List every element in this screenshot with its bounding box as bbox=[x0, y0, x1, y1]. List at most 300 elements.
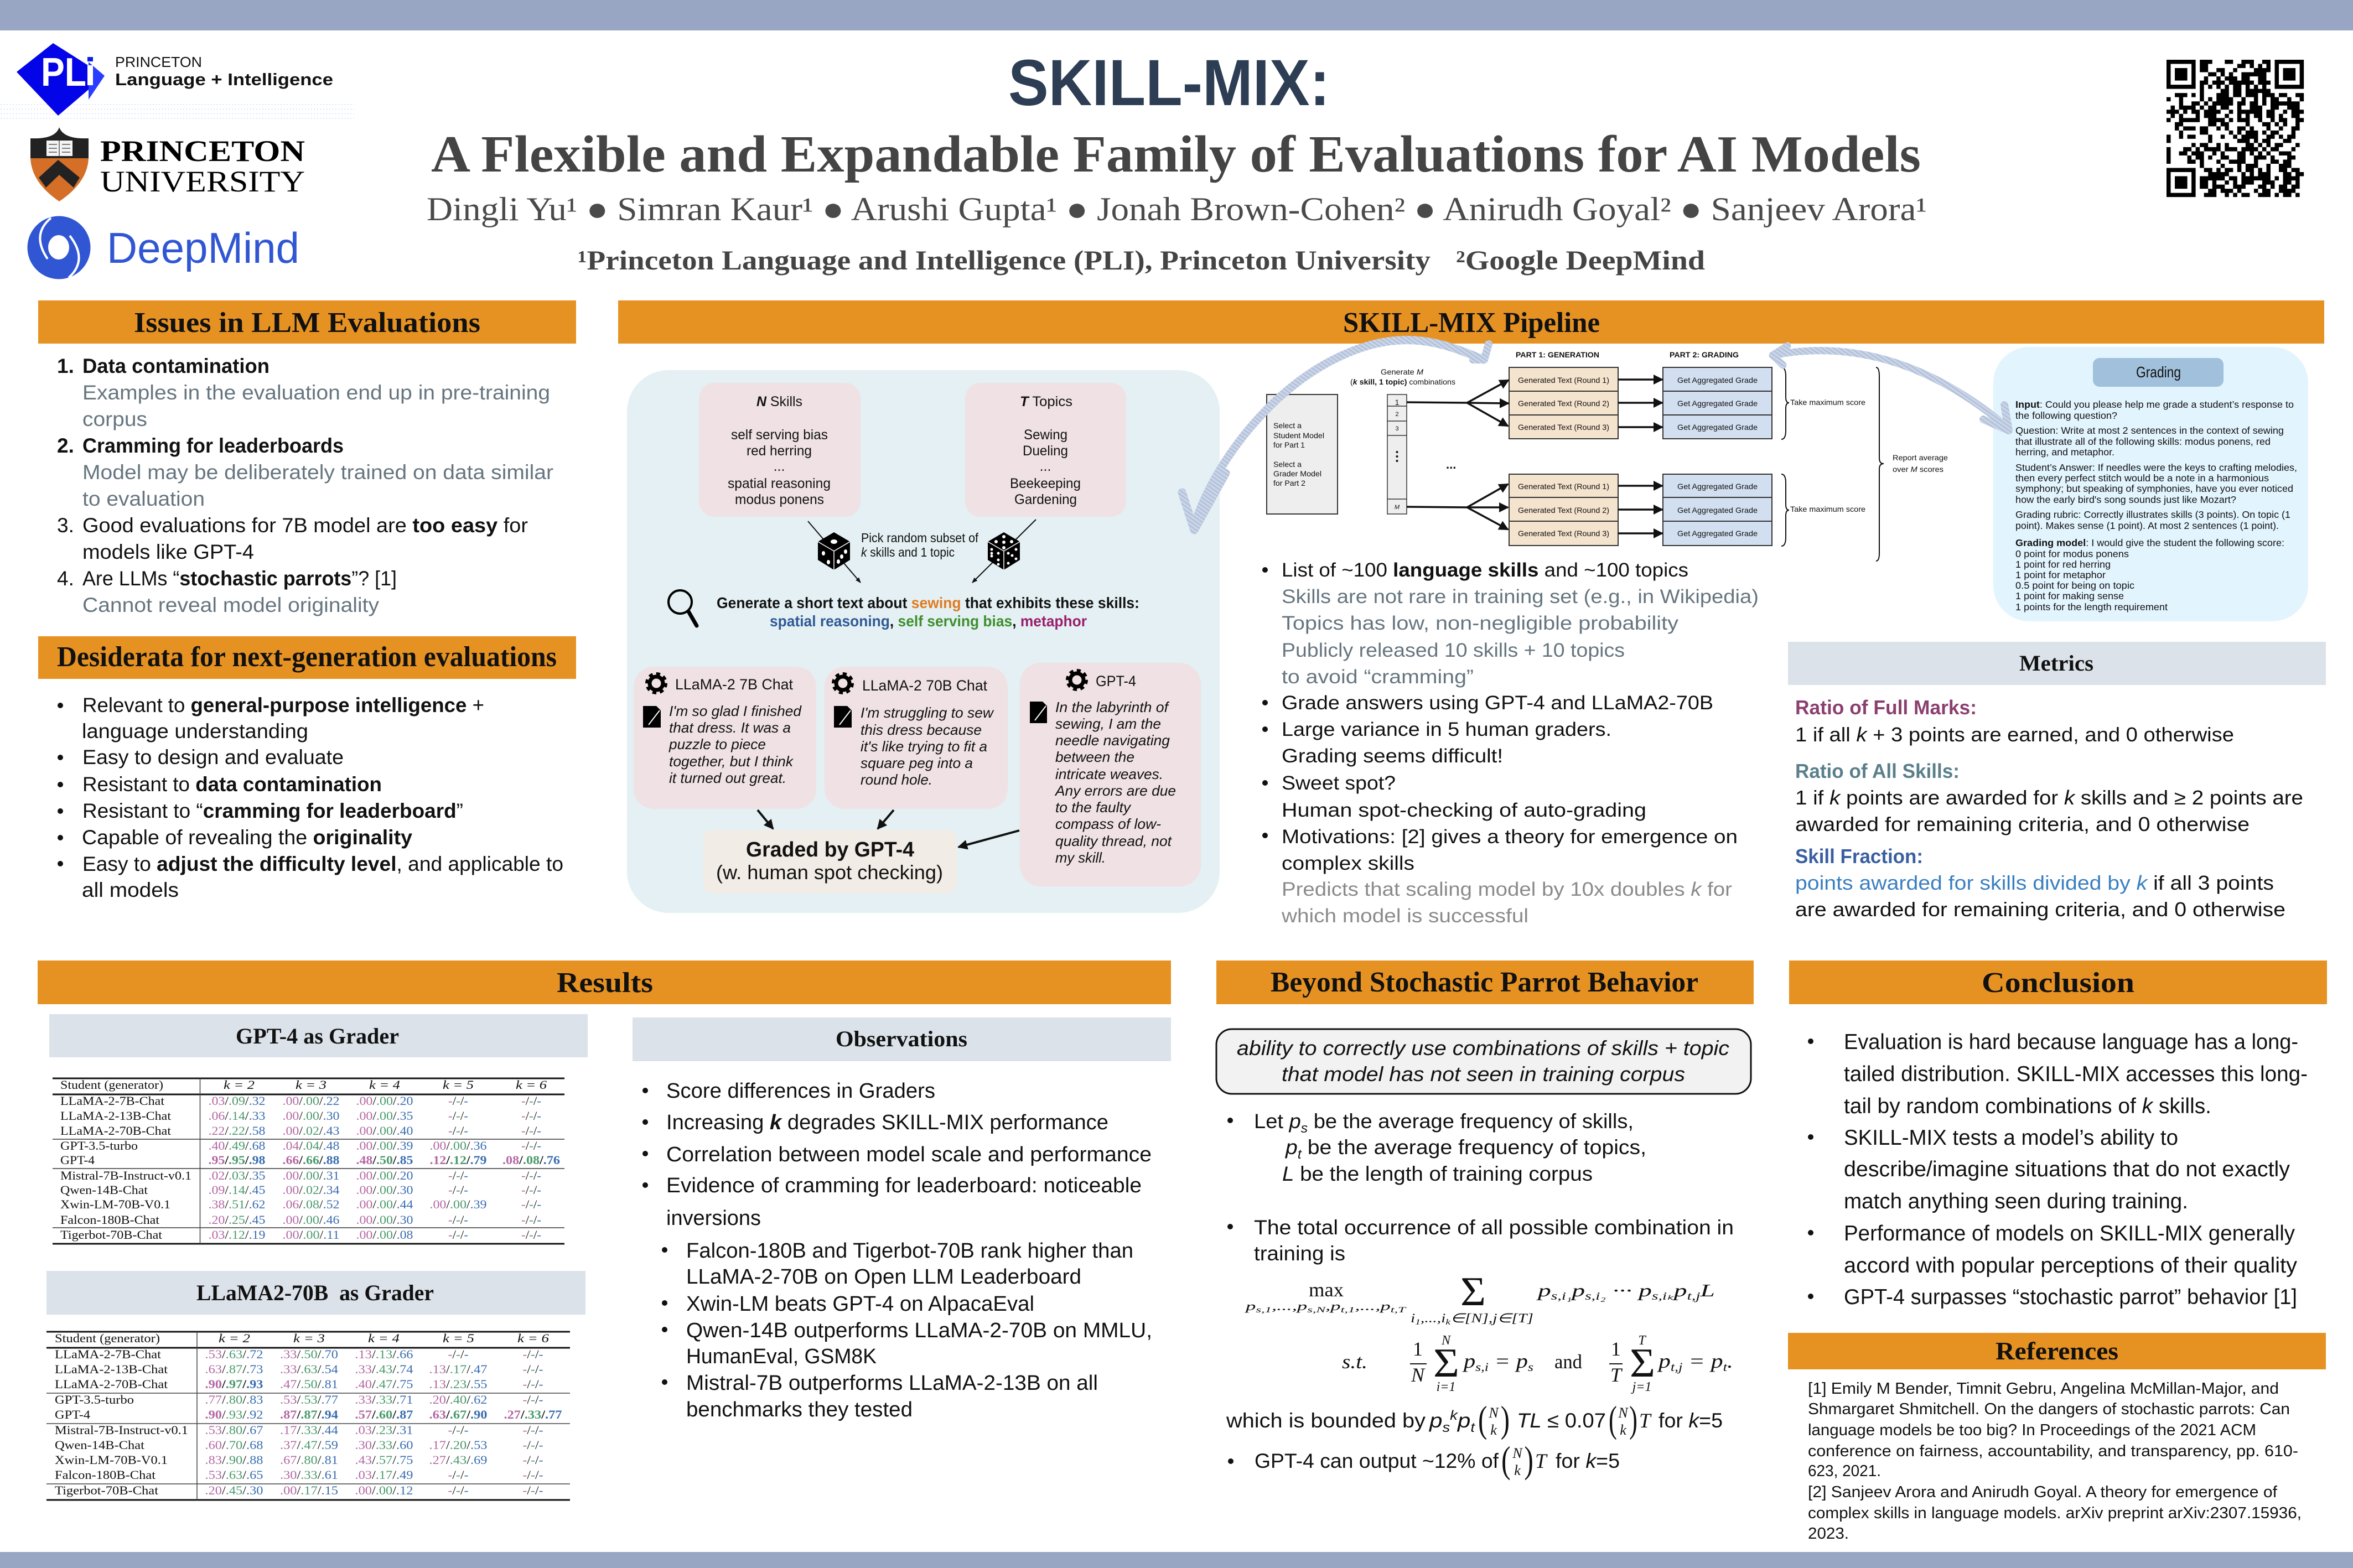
logo: Princeton University: PRINCETON bbox=[100, 134, 305, 168]
table: LLaMA2-70B grader scores: .13/.13/.66 bbox=[355, 1347, 413, 1361]
label: ellipsis: ... bbox=[1446, 458, 1456, 471]
heading: GPT-4 as grader bbox=[49, 1014, 588, 1057]
table: GPT-4 grader scores: .06/.14/.33 bbox=[208, 1109, 266, 1123]
table: LLaMA2-70B grader scores: .00/.00/.12 bbox=[355, 1483, 413, 1497]
table: GPT-4 grader scores: .06/.08/.52 bbox=[282, 1197, 340, 1211]
table: LLaMA2-70B grader scores: .13/.17/.47 bbox=[429, 1362, 487, 1376]
table: GPT-4 grader scores: .03/.09/.32 bbox=[208, 1094, 266, 1108]
text block: issues list: 1. bbox=[57, 355, 74, 377]
text block: definitions: Let p bbox=[1254, 1110, 1300, 1133]
equation: constraints: t,j bbox=[1671, 1360, 1682, 1374]
box: select models bbox=[1267, 394, 1338, 514]
equation: maximization: ∈[N],j∈[T] bbox=[1450, 1311, 1533, 1325]
table: GPT-4 grader scores: -/-/- bbox=[521, 1094, 541, 1108]
heading: issues bbox=[38, 300, 576, 344]
table: GPT-4 grader scores bbox=[53, 1078, 564, 1244]
text block: desiderata list bbox=[58, 694, 563, 901]
table: LLaMA2-70B grader scores: .33/.33/.71 bbox=[355, 1393, 413, 1406]
table: GPT-4 grader scores: -/-/- bbox=[521, 1213, 541, 1227]
table: LLaMA2-70B grader scores: k = 3 bbox=[293, 1331, 325, 1345]
text block: bound: N bbox=[1488, 1405, 1499, 1421]
equation: constraints: N bbox=[1441, 1333, 1452, 1348]
heading: SKILL-MIX pipeline: SKILL-MIX Pipeline bbox=[1343, 307, 1600, 339]
table: LLaMA2-70B grader scores: .53/.53/.77 bbox=[280, 1393, 338, 1406]
box: select models: Student Model bbox=[1273, 431, 1324, 440]
text block: issues list: 2. bbox=[57, 434, 74, 457]
table: LLaMA2-70B grader scores: .53/.80/.67 bbox=[205, 1423, 263, 1437]
text block: bound: for k=5 bbox=[1658, 1409, 1723, 1432]
column: combinations list: M bbox=[1395, 504, 1400, 511]
table: GPT-4 grader scores: LLaMA-2-7B-Chat bbox=[60, 1094, 164, 1108]
text block: conclusion bullets: tail by random combinations of k skills. bbox=[1844, 1094, 2211, 1118]
text block: bound: TL ≤ 0.07 bbox=[1517, 1409, 1606, 1432]
box: T topics: Beekeeping bbox=[1010, 476, 1081, 491]
equation: maximization: Σ bbox=[1460, 1269, 1486, 1315]
table: GPT-4 grader scores: -/-/- bbox=[448, 1109, 468, 1123]
arrow: topics through die bbox=[972, 520, 1036, 583]
text block: bound: ( ) bbox=[1478, 1398, 1510, 1440]
text block: observation bullets: inversions bbox=[666, 1207, 761, 1230]
table: GPT-4 grader scores: .12/.12/.79 bbox=[429, 1153, 487, 1167]
box: grading header bbox=[2093, 358, 2224, 387]
table: LLaMA2-70B grader scores: .63/.87/.73 bbox=[205, 1362, 263, 1376]
text block: ratio of all skills: awarded for remaining criteria, and 0 otherwise bbox=[1795, 813, 2250, 835]
box: T topics bbox=[965, 383, 1126, 517]
text block: issues list: 3. bbox=[57, 514, 74, 537]
table: GPT-4 grader scores: -/-/- bbox=[448, 1213, 468, 1227]
table: LLaMA2-70B grader scores: .33/.63/.54 bbox=[280, 1362, 338, 1376]
logo: Princeton Language + Intelligence: PRINCETON bbox=[115, 54, 202, 70]
heading: beyond: Beyond Stochastic Parrot Behavior bbox=[1271, 967, 1698, 998]
box: GPT-4 output: to the faulty bbox=[1055, 799, 1132, 816]
table: GPT-4 grader scores: -/-/- bbox=[521, 1183, 541, 1197]
text block: conclusion bullets: SKILL-MIX tests a model’s ability to bbox=[1844, 1126, 2178, 1150]
text block: ratio of all skills bbox=[1795, 760, 2303, 835]
table: GPT-4 grader scores: .00/.00/.20 bbox=[356, 1169, 413, 1182]
table: GPT-4 grader scores: GPT-3.5-turbo bbox=[60, 1139, 138, 1152]
text block: definitions: be the average frequency of skills, bbox=[1308, 1110, 1634, 1133]
heading: LLaMA2-70B as grader bbox=[46, 1271, 585, 1315]
table: LLaMA2-70B grader scores: -/-/- bbox=[522, 1453, 543, 1467]
table: LLaMA2-70B grader scores: .33/.43/.74 bbox=[355, 1362, 413, 1376]
equation: maximization: s,N bbox=[1307, 1306, 1326, 1315]
box: LLaMA-2 7B output: LLaMA-2 7B Chat bbox=[675, 676, 793, 693]
label: generate M combinations: Generate M bbox=[1381, 367, 1423, 376]
table: LLaMA2-70B grader scores: -/-/- bbox=[522, 1483, 543, 1497]
text block: GPT-4 output: k bbox=[1514, 1462, 1521, 1478]
table: LLaMA2-70B grader scores: Student (generator) bbox=[55, 1331, 160, 1345]
equation: constraints: j=1 bbox=[1631, 1380, 1651, 1394]
table: GPT-4 grader scores: Qwen-14B-Chat bbox=[60, 1183, 148, 1197]
table: GPT-4 grader scores: -/-/- bbox=[521, 1109, 541, 1123]
box: LLaMA-2 70B output bbox=[825, 667, 1008, 809]
text block: pipeline notes: Motivations: [2] gives a theory for emergence on bbox=[1282, 826, 1738, 848]
panel: LLaMA2-70B as grader bbox=[46, 1271, 585, 1500]
table: GPT-4 grader scores: .00/.00/.11 bbox=[282, 1228, 340, 1242]
text block: grading prompt: 0.5 point for being on topic bbox=[2015, 580, 2134, 591]
text block: grading prompt: Grading model: I would give the student the following score: bbox=[2015, 537, 2284, 548]
table: LLaMA2-70B grader scores: Falcon-180B-Chat bbox=[55, 1468, 156, 1482]
text block: bound: k bbox=[1450, 1408, 1459, 1423]
table: LLaMA2-70B grader scores: -/-/- bbox=[522, 1468, 543, 1482]
group: first combination rounds bbox=[1407, 367, 1865, 439]
text block: definitions: L be the length of training corpus bbox=[1282, 1162, 1593, 1185]
table: LLaMA2-70B grader scores: .27/.43/.69 bbox=[429, 1453, 487, 1467]
heading: LLaMA2-70B as grader: LLaMA2-70B as Grader bbox=[196, 1280, 434, 1305]
box: LLaMA-2 70B output: I'm struggling to sew bbox=[861, 704, 994, 721]
text block: GPT-4 output: for k=5 bbox=[1556, 1450, 1620, 1472]
text block: grading prompt bbox=[2015, 399, 2297, 612]
text block: issues list: Model may be deliberately trained on data similar bbox=[82, 461, 553, 484]
label: pick random subset: Pick random subset of bbox=[861, 531, 979, 545]
table: LLaMA2-70B grader scores: .90/.97/.93 bbox=[205, 1377, 263, 1391]
table: LLaMA2-70B grader scores: .20/.45/.30 bbox=[205, 1483, 263, 1497]
table: LLaMA2-70B grader scores: .00/.17/.15 bbox=[280, 1483, 338, 1497]
heading: issues: Issues in LLM Evaluations bbox=[134, 307, 480, 339]
label: generate M combinations: (k skill, 1 topic) combinations bbox=[1350, 377, 1455, 386]
text block: grading prompt: Student’s Answer: If needles were the keys to crafting melodies, bbox=[2015, 462, 2297, 473]
equation: maximization: p bbox=[1538, 1280, 1547, 1300]
table: LLaMA2-70B grader scores: .37/.47/.59 bbox=[280, 1438, 338, 1452]
arrow: 70B to grader bbox=[878, 810, 894, 829]
text block: issues list: Are LLMs “stochastic parrots”? [1] bbox=[82, 567, 397, 590]
arrow: 7B to grader bbox=[758, 810, 773, 829]
group: last combination rounds: Get Aggregated Grade bbox=[1677, 482, 1758, 491]
equation: maximization: L bbox=[1699, 1280, 1715, 1300]
table: GPT-4 grader scores: .08/.08/.76 bbox=[502, 1153, 560, 1167]
table: LLaMA2-70B grader scores: .63/.67/.90 bbox=[429, 1408, 487, 1421]
table: GPT-4 grader scores: .00/.00/.40 bbox=[356, 1124, 413, 1138]
text block: issues list: Good evaluations for 7B model are too easy for bbox=[82, 514, 528, 537]
box: LLaMA-2 70B output: LLaMA-2 70B Chat bbox=[862, 677, 987, 694]
table: LLaMA2-70B grader scores: Tigerbot-70B-Chat bbox=[55, 1483, 158, 1497]
text block: conclusion bullets: describe/imagine situations that do not exactly bbox=[1844, 1157, 2290, 1181]
panel: grading example bbox=[1993, 347, 2308, 621]
table: LLaMA2-70B grader scores: -/-/- bbox=[448, 1483, 468, 1497]
column: combinations list: 2 bbox=[1395, 411, 1399, 418]
table: GPT-4 grader scores: Student (generator) bbox=[60, 1078, 163, 1092]
equation: constraints bbox=[1342, 1333, 1733, 1394]
text block: issues list: Cramming for leaderboards bbox=[82, 434, 344, 457]
text block: observation bullets: Correlation between model scale and performance bbox=[666, 1143, 1152, 1166]
logo: Princeton Language + Intelligence bbox=[0, 43, 354, 122]
table: GPT-4 grader scores: .20/.25/.45 bbox=[208, 1213, 266, 1227]
heading: observations: Observations bbox=[836, 1026, 967, 1051]
text block: grading prompt: how the early bird's song sounds just like Mozart? bbox=[2015, 494, 2236, 505]
affiliations bbox=[578, 245, 1705, 276]
panel: metrics bbox=[1788, 642, 2326, 921]
heading: conclusion bbox=[1789, 960, 2327, 1004]
box: LLaMA-2 70B output: it's like trying to fit a bbox=[861, 738, 987, 755]
table: GPT-4 grader scores: .00/.00/.39 bbox=[356, 1139, 413, 1152]
table: LLaMA2-70B grader scores: .30/.33/.60 bbox=[355, 1438, 413, 1452]
box: GPT-4 output: sewing, I am the bbox=[1055, 715, 1161, 732]
box: graded by GPT-4 bbox=[703, 830, 957, 894]
heading: metrics: Metrics bbox=[2019, 651, 2093, 676]
equation: constraints: p bbox=[1464, 1350, 1474, 1372]
box: select models: for Part 2 bbox=[1273, 479, 1305, 487]
box: T topics: Dueling bbox=[1023, 443, 1068, 459]
text block: definitions: The total occurrence of all possible combination in bbox=[1254, 1216, 1734, 1239]
table: GPT-4 grader scores: GPT-4 bbox=[60, 1153, 95, 1167]
heading: beyond bbox=[1216, 960, 1754, 1004]
icon: magnifying glass bbox=[668, 590, 697, 626]
box: graded by GPT-4: (w. human spot checking) bbox=[716, 861, 943, 884]
text block: observation bullets: Evidence of cramming for leaderboard: noticeable bbox=[666, 1174, 1142, 1197]
text block: skill fraction: points awarded for skills divided by k if all 3 points bbox=[1795, 871, 2274, 894]
text block: pipeline notes: Large variance in 5 human graders. bbox=[1282, 719, 1611, 740]
text block: desiderata list: Capable of revealing the originality bbox=[82, 826, 412, 849]
table: LLaMA2-70B grader scores: -/-/- bbox=[522, 1393, 543, 1406]
table: GPT-4 grader scores: .66/.66/.88 bbox=[282, 1153, 340, 1167]
table: LLaMA2-70B grader scores bbox=[46, 1331, 570, 1500]
column: combinations list: 3 bbox=[1395, 425, 1399, 432]
text block: grading prompt: 1 point for making sense bbox=[2015, 590, 2124, 601]
text block: conclusion bullets: match anything seen during training. bbox=[1844, 1190, 2188, 1213]
table: GPT-4 grader scores: k = 4 bbox=[369, 1078, 400, 1092]
table: LLaMA2-70B grader scores: GPT-3.5-turbo bbox=[55, 1393, 134, 1406]
table: GPT-4 grader scores: .03/.12/.19 bbox=[208, 1228, 266, 1242]
box: N skills: ... bbox=[774, 459, 785, 474]
text block: grading prompt: symphony; but speaking of symphonies, have you ever noticed bbox=[2015, 483, 2293, 494]
equation: constraints: 1 bbox=[1611, 1338, 1621, 1360]
equation: maximization: t,1 bbox=[1341, 1306, 1355, 1315]
table: LLaMA2-70B grader scores: .17/.20/.53 bbox=[429, 1438, 487, 1452]
table: GPT-4 grader scores: -/-/- bbox=[448, 1183, 468, 1197]
panel: conclusion bbox=[1789, 960, 2327, 1309]
text block: pipeline notes: Predicts that scaling model by 10x doubles k for bbox=[1282, 879, 1732, 900]
text block: conclusion bullets bbox=[1808, 1030, 2308, 1309]
table: GPT-4 grader scores: .02/.03/.35 bbox=[208, 1169, 266, 1182]
table: LLaMA2-70B grader scores: k = 5 bbox=[443, 1331, 474, 1345]
table: LLaMA2-70B grader scores: .27/.33/.77 bbox=[504, 1408, 562, 1421]
group: first combination rounds: Get Aggregated Grade bbox=[1677, 399, 1758, 408]
text block: reference list: Shmargaret Shmitchell. On the dangers of stochastic parrots: Can bbox=[1808, 1400, 2290, 1418]
text block: reference list: language models be too big? In Proceedings of the 2021 ACM bbox=[1808, 1421, 2256, 1439]
group: last combination rounds: Generated Text (Round 2) bbox=[1518, 506, 1609, 515]
text block: desiderata list: Relevant to general-purpose intelligence + bbox=[82, 694, 484, 716]
heading: SKILL-MIX pipeline bbox=[618, 300, 2324, 344]
group: first combination rounds: Take maximum score bbox=[1790, 398, 1865, 407]
text block: skill fraction bbox=[1795, 845, 2285, 921]
text block: definitions: t bbox=[1298, 1147, 1302, 1162]
table: LLaMA2-70B grader scores: -/-/- bbox=[522, 1362, 543, 1376]
text block: bound: s bbox=[1442, 1420, 1450, 1435]
box: grading header: Grading bbox=[2136, 364, 2181, 381]
text block: observation bullets: Qwen-14B outperforms LLaMA-2-70B on MMLU, bbox=[686, 1319, 1152, 1342]
table: LLaMA2-70B grader scores: .17/.33/.44 bbox=[280, 1423, 338, 1437]
table: LLaMA2-70B grader scores: Mistral-7B-Instruct-v0.1 bbox=[55, 1423, 188, 1437]
table: GPT-4 grader scores: .00/.00/.46 bbox=[282, 1213, 340, 1227]
text block: bound: t bbox=[1470, 1420, 1476, 1435]
table: GPT-4 grader scores: -/-/- bbox=[448, 1094, 468, 1108]
title: SKILL-MIX: bbox=[1008, 46, 1330, 120]
text block: conclusion bullets: GPT-4 surpasses “stochastic parrot” behavior [1] bbox=[1844, 1285, 2297, 1309]
arrow: hand-drawn to generation panel bbox=[1182, 340, 1489, 530]
text block: observation bullets: Increasing k degrades SKILL-MIX performance bbox=[666, 1111, 1108, 1134]
text block: pipeline notes: Human spot-checking of auto-grading bbox=[1282, 799, 1646, 821]
table: LLaMA2-70B grader scores: k = 2 bbox=[219, 1331, 250, 1345]
heading: references bbox=[1788, 1333, 2326, 1369]
callout: definition: ability to correctly use combinations of skills + topic bbox=[1237, 1037, 1730, 1060]
table: LLaMA2-70B grader scores: .13/.23/.55 bbox=[429, 1377, 487, 1391]
label: pick random subset: k skills and 1 topic bbox=[861, 545, 955, 559]
panel: observations bbox=[633, 1017, 1171, 1421]
box: GPT-4 output: needle navigating bbox=[1055, 732, 1170, 749]
text block: pipeline notes bbox=[1262, 559, 1759, 927]
box: select models: for Part 1 bbox=[1273, 440, 1305, 449]
text block: pipeline notes: Skills are not rare in training set (e.g., in Wikipedia) bbox=[1282, 586, 1759, 608]
equation: constraints: N bbox=[1411, 1364, 1426, 1386]
text block: bound: k bbox=[1620, 1422, 1626, 1438]
brace: report average bbox=[1876, 367, 1948, 561]
text block: bound: k bbox=[1490, 1422, 1497, 1438]
box: LLaMA-2 7B output bbox=[634, 667, 816, 809]
group: first combination rounds: Get Aggregated Grade bbox=[1677, 423, 1758, 432]
text block: pipeline notes: Grading seems difficult! bbox=[1282, 745, 1503, 767]
text block: bound: N bbox=[1618, 1405, 1629, 1421]
panel: desiderata bbox=[38, 636, 576, 901]
group: last combination rounds: Get Aggregated Grade bbox=[1677, 529, 1758, 538]
equation: constraints: = p bbox=[1682, 1350, 1723, 1372]
group: last combination rounds: Generated Text (Round 1) bbox=[1518, 482, 1609, 491]
equation: constraints: s bbox=[1528, 1360, 1533, 1374]
box: select models: Select a bbox=[1273, 421, 1302, 430]
text block: bound: p bbox=[1429, 1409, 1441, 1432]
table: GPT-4 grader scores: .00/.00/.30 bbox=[356, 1213, 413, 1227]
heading: results: Results bbox=[557, 967, 653, 999]
logo: DeepMind: DeepMind bbox=[107, 224, 299, 272]
heading: conclusion: Conclusion bbox=[1982, 967, 2134, 999]
table: GPT-4 grader scores: .00/.00/.44 bbox=[356, 1197, 413, 1211]
equation: maximization: ··· p bbox=[1606, 1280, 1652, 1300]
subtitle: A Flexible and Expandable Family of Evaluations for AI Models bbox=[431, 126, 1921, 183]
table: GPT-4 grader scores: .00/.00/.31 bbox=[282, 1169, 340, 1182]
text block: observation bullets: LLaMA-2-70B on Open LLM Leaderboard bbox=[686, 1265, 1081, 1289]
box: N skills: N Skills bbox=[756, 394, 802, 409]
text block: grading prompt: the following question? bbox=[2015, 410, 2117, 421]
table: LLaMA2-70B grader scores: .53/.63/.72 bbox=[205, 1347, 263, 1361]
text block: bound: T bbox=[1639, 1410, 1652, 1432]
table: GPT-4 grader scores: .95/.95/.98 bbox=[208, 1153, 266, 1167]
table: GPT-4 grader scores: k = 3 bbox=[296, 1078, 326, 1092]
table: GPT-4 grader scores: -/-/- bbox=[448, 1124, 468, 1138]
group: last combination rounds: Get Aggregated Grade bbox=[1677, 506, 1758, 515]
text block: desiderata list: all models bbox=[82, 879, 179, 901]
equation: maximization: 1 bbox=[1415, 1318, 1421, 1327]
group: first combination rounds: Get Aggregated Grade bbox=[1677, 376, 1758, 385]
table: GPT-4 grader scores: .00/.00/.36 bbox=[429, 1139, 487, 1152]
box: GPT-4 output: intricate weaves. bbox=[1055, 766, 1163, 782]
table: LLaMA2-70B grader scores: .60/.70/.68 bbox=[205, 1438, 263, 1452]
text block: pipeline notes: Sweet spot? bbox=[1282, 772, 1396, 794]
table: GPT-4 grader scores: .00/.00/.39 bbox=[429, 1197, 487, 1211]
top banner bbox=[0, 0, 2353, 30]
equation: maximization: ,...,i bbox=[1421, 1311, 1445, 1325]
table: LLaMA2-70B grader scores: .03/.23/.31 bbox=[355, 1423, 413, 1437]
text block: issues list: Examples in the evaluation end up in pre-training bbox=[82, 381, 550, 404]
box: GPT-4 output: quality thread, not bbox=[1055, 833, 1173, 849]
text block: prompt: spatial reasoning, self serving bias, metaphor bbox=[770, 612, 1087, 630]
equation: maximization: p bbox=[1246, 1299, 1252, 1313]
box: select models: Grader Model bbox=[1273, 469, 1321, 478]
text block: observation bullets: Xwin-LM beats GPT-4 on AlpacaEval bbox=[686, 1292, 1034, 1316]
text block: GPT-4 output: ( ) bbox=[1501, 1439, 1533, 1481]
text block: bound: ( ) bbox=[1609, 1398, 1637, 1440]
text block: grading prompt: that illustrate all of the following skills: modus ponens, red bbox=[2015, 436, 2271, 447]
table: GPT-4 grader scores: .22/.22/.58 bbox=[208, 1124, 266, 1138]
text block: ratio of full marks bbox=[1795, 696, 2234, 746]
equation: constraints: s,i bbox=[1475, 1360, 1489, 1374]
box: LLaMA-2 70B output: this dress because bbox=[861, 721, 982, 738]
equation: constraints: = p bbox=[1489, 1350, 1528, 1372]
table: GPT-4 grader scores: .00/.00/.35 bbox=[356, 1109, 413, 1123]
box: N skills: red herring bbox=[747, 443, 812, 459]
text block: reference list bbox=[1808, 1380, 2302, 1543]
table: GPT-4 grader scores: .00/.00/.20 bbox=[356, 1094, 413, 1108]
table: LLaMA2-70B grader scores: -/-/- bbox=[522, 1423, 543, 1437]
table: GPT-4 grader scores: Falcon-180B-Chat bbox=[60, 1213, 159, 1227]
heading: observations bbox=[633, 1017, 1171, 1061]
text block: reference list: [1] Emily M Bender, Timnit Gebru, Angelina McMillan-Major, and bbox=[1808, 1380, 2279, 1398]
arrow: GPT-4 to grader bbox=[958, 830, 1019, 847]
chart: pipeline diagram bbox=[1267, 350, 1948, 561]
equation: maximization: i bbox=[1411, 1311, 1414, 1325]
table: GPT-4 grader scores: .40/.49/.68 bbox=[208, 1139, 266, 1152]
text block: issues list bbox=[57, 355, 553, 616]
text block: ratio of full marks: 1 if all k + 3 points are earned, and 0 otherwise bbox=[1795, 723, 2234, 746]
text block: issues list: 4. bbox=[57, 567, 74, 590]
heading: results bbox=[38, 960, 1171, 1004]
bottom banner bbox=[0, 1552, 2353, 1568]
text block: pipeline notes: Topics has low, non-negligible probability bbox=[1282, 612, 1679, 634]
text block: definitions bbox=[1227, 1110, 1734, 1265]
panel: generation example bbox=[627, 370, 1220, 913]
text block: grading prompt: 1 point for metaphor bbox=[2015, 569, 2106, 580]
table: GPT-4 grader scores: -/-/- bbox=[521, 1139, 541, 1152]
table: GPT-4 grader scores: .00/.00/.30 bbox=[282, 1109, 340, 1123]
label: generate M combinations bbox=[1350, 367, 1455, 386]
table: LLaMA2-70B grader scores: .47/.50/.81 bbox=[280, 1377, 338, 1391]
box: N skills: modus ponens bbox=[735, 492, 824, 507]
text block: conclusion bullets: Evaluation is hard because language has a long- bbox=[1844, 1030, 2298, 1054]
equation: maximization: s,i₁ bbox=[1551, 1290, 1572, 1302]
table: GPT-4 grader scores: LLaMA-2-13B-Chat bbox=[60, 1109, 171, 1123]
box: LLaMA-2 7B output: it turned out great. bbox=[669, 770, 786, 786]
text block: prompt bbox=[717, 594, 1139, 630]
table: LLaMA2-70B grader scores: .90/.93/.92 bbox=[205, 1408, 263, 1421]
panel: references bbox=[1788, 1333, 2326, 1543]
box: N skills: self serving bias bbox=[731, 427, 828, 443]
equation: constraints: T bbox=[1610, 1364, 1623, 1386]
text block: prompt: Generate a short text about sewing that exhibits these skills: bbox=[717, 594, 1139, 611]
text block: grading prompt: 0 point for modus ponens bbox=[2015, 548, 2129, 559]
text block: desiderata list: Resistant to “cramming for leaderboard” bbox=[82, 799, 463, 822]
authors: Dingli Yu¹ ● Simran Kaur¹ ● Arushi Gupta¹ ● Jonah Brown-Cohen² ● Anirudh Goyal² ● Sanjeev Arora¹ bbox=[427, 191, 1927, 227]
box: GPT-4 output: compass of low- bbox=[1055, 816, 1161, 832]
text block: grading prompt: 1 points for the length requirement bbox=[2015, 601, 2168, 612]
table: GPT-4 grader scores: .04/.04/.48 bbox=[282, 1139, 340, 1152]
text block: GPT-4 output: T bbox=[1535, 1450, 1548, 1473]
equation: constraints: t bbox=[1723, 1360, 1728, 1374]
text block: grading prompt: point). Makes sense (1 point). At most 2 sentences (1 point). bbox=[2015, 520, 2279, 531]
table: LLaMA2-70B grader scores: -/-/- bbox=[448, 1423, 468, 1437]
box: GPT-4 output: Any errors are due bbox=[1054, 782, 1176, 799]
text block: observation bullets: Falcon-180B and Tigerbot-70B rank higher than bbox=[686, 1239, 1133, 1263]
group: last combination rounds: Take maximum score bbox=[1790, 505, 1865, 513]
box: LLaMA-2 7B output: I'm so glad I finished bbox=[669, 703, 802, 719]
equation: maximization: p bbox=[1570, 1280, 1585, 1300]
